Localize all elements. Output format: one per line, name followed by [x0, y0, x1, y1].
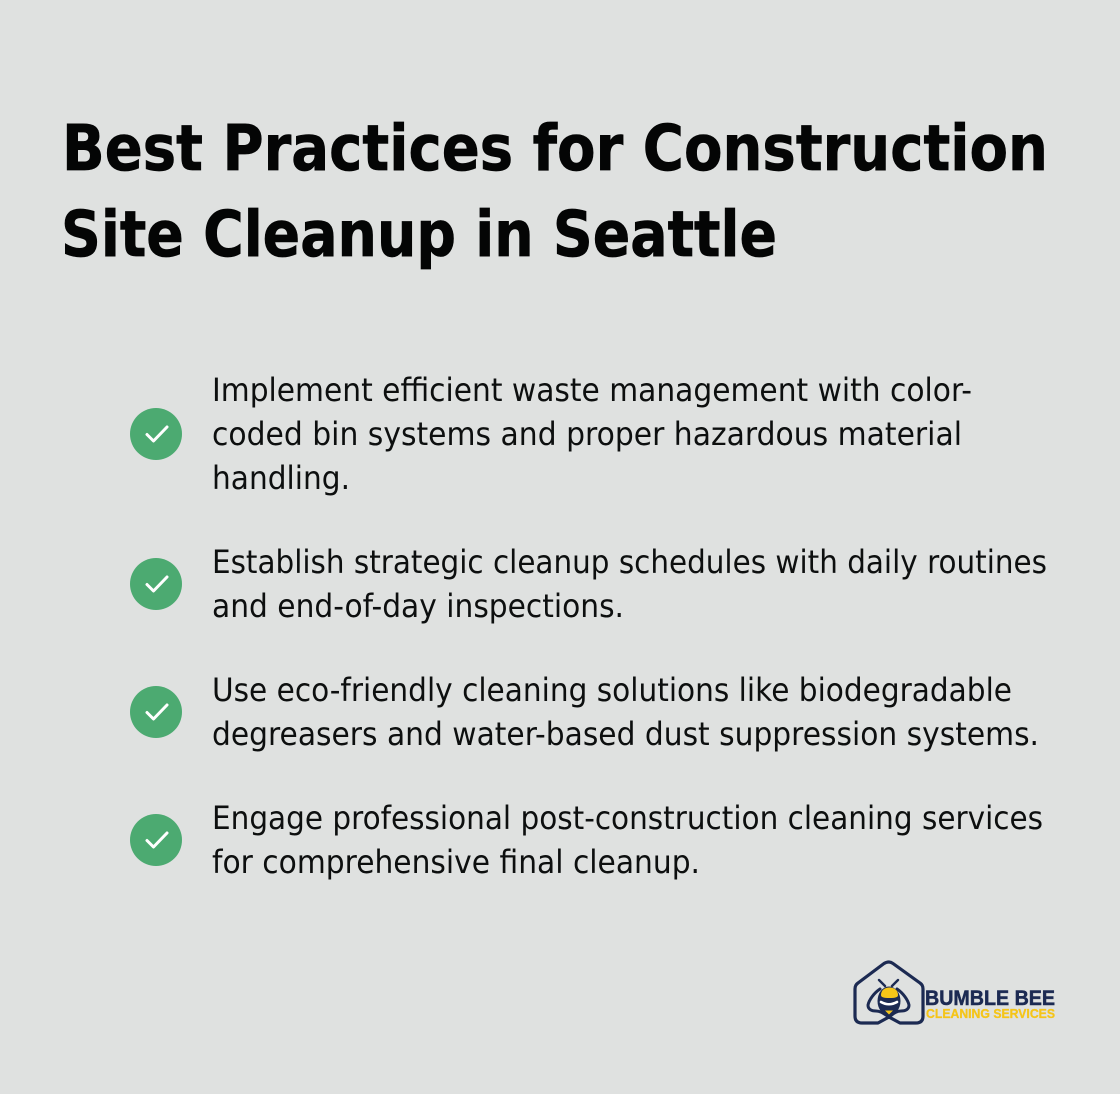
logo wordmark: BUMBLE BEE: [925, 987, 1055, 1010]
text: item 4: for comprehensive final cleanup.: [212, 843, 700, 881]
text: item 1: coded bin systems and proper hazardous material: [212, 415, 962, 453]
logo: Bumble Bee Cleaning Services: [855, 962, 1055, 1023]
item 1: waste management: [130, 371, 972, 497]
icon: check 1: [130, 408, 182, 460]
text: item 3: degreasers and water-based dust suppression systems.: [212, 715, 1039, 753]
text: item 2: and end-of-day inspections.: [212, 587, 624, 625]
logo wordmark: CLEANING SERVICES: [926, 1007, 1055, 1021]
item 3: eco-friendly solutions: [130, 671, 1039, 753]
icon: check 3: [130, 686, 182, 738]
text: item 3: Use eco-friendly cleaning solutions like biodegradable: [212, 671, 1012, 709]
checklist: [130, 371, 1047, 881]
text: item 4: Engage professional post-construction cleaning services: [212, 799, 1043, 837]
icon: check 2: [130, 558, 182, 610]
icon: check 4: [130, 814, 182, 866]
text: item 1: [212, 371, 972, 497]
text: item 1: handling.: [212, 459, 350, 497]
text: item 3: [212, 671, 1039, 753]
logo wordmark: [925, 987, 1055, 1021]
item 2: cleanup schedules: [130, 543, 1047, 625]
text: item 2: Establish strategic cleanup schedules with daily routines: [212, 543, 1047, 581]
text: item 2: [212, 543, 1047, 625]
text: item 4: [212, 799, 1043, 881]
text: item 1: Implement efficient waste management with color-: [212, 371, 972, 409]
icon: bee in house: [855, 962, 923, 1023]
item 4: professional services: [130, 799, 1043, 881]
title: [61, 112, 1048, 271]
title: Site Cleanup in Seattle: [61, 198, 777, 271]
